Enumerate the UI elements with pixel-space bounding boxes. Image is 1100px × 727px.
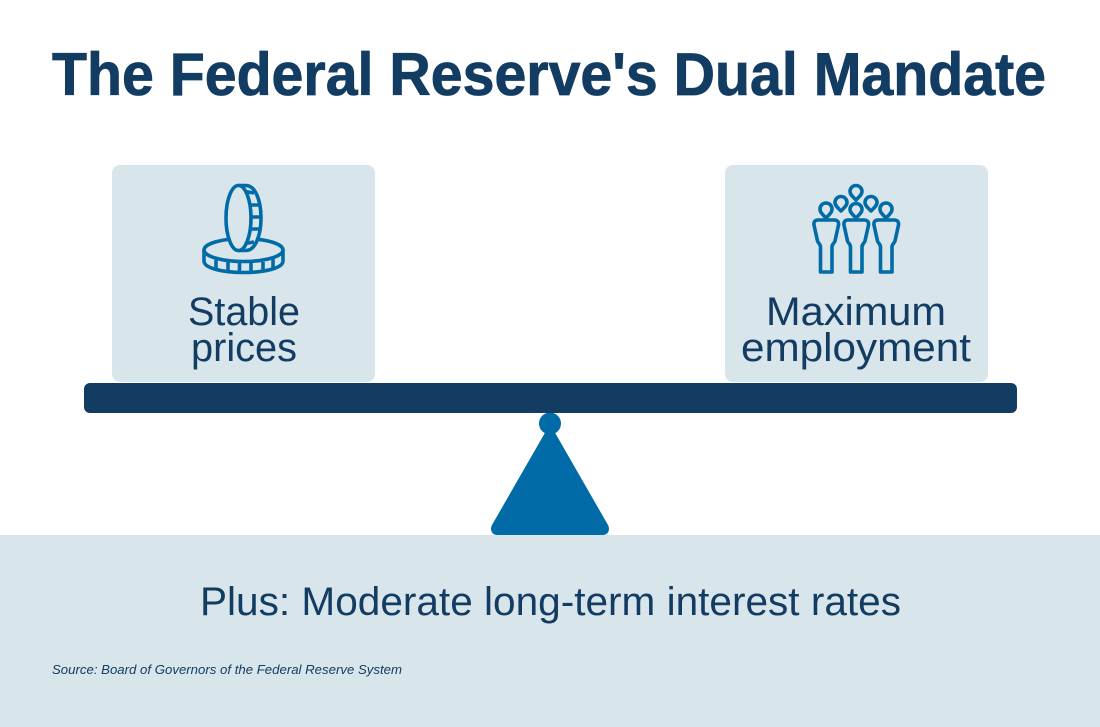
- bottom band: [0, 535, 1100, 727]
- source note: Source: Board of Governors of the Federal Reserve System: [52, 662, 402, 677]
- label: maximum employment: Maximum: [766, 290, 946, 334]
- icon: balance fulcrum: [491, 412, 609, 535]
- icon: crowd of people: [814, 186, 899, 272]
- subheading: plus: Plus: Moderate long-term interest rates: [200, 580, 901, 624]
- title: The Federal Reserve's Dual Mandate: [52, 41, 1046, 108]
- balance beam: [84, 383, 1017, 413]
- icon: coins: [204, 186, 283, 272]
- panel: stable prices: [112, 165, 375, 382]
- label: stable prices: Stable: [188, 290, 300, 334]
- label: maximum employment: employment: [741, 326, 971, 370]
- label: maximum employment: [741, 290, 971, 370]
- panel: maximum employment: [725, 165, 988, 382]
- label: stable prices: prices: [191, 326, 297, 370]
- label: stable prices: [188, 290, 300, 370]
